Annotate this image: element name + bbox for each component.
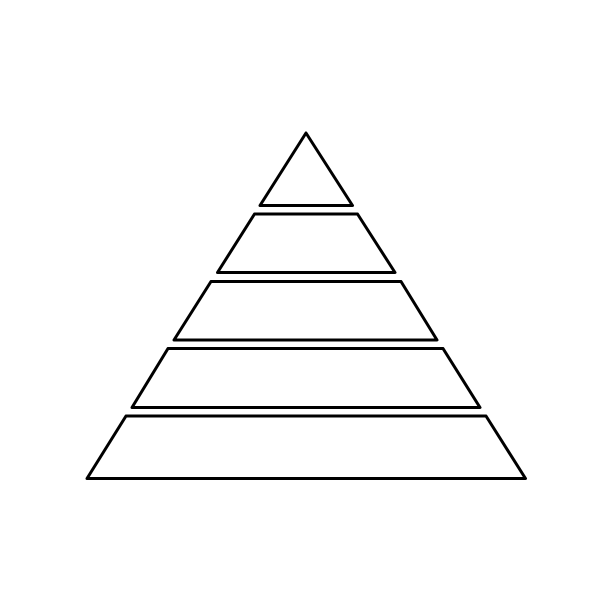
pyramid tier 4 xyxy=(132,348,480,408)
pyramid tier 3 xyxy=(174,282,437,340)
pyramid tier 1: apex xyxy=(260,133,352,206)
pyramid tier 5: base xyxy=(87,416,526,478)
pyramid tier 2 xyxy=(218,214,395,272)
